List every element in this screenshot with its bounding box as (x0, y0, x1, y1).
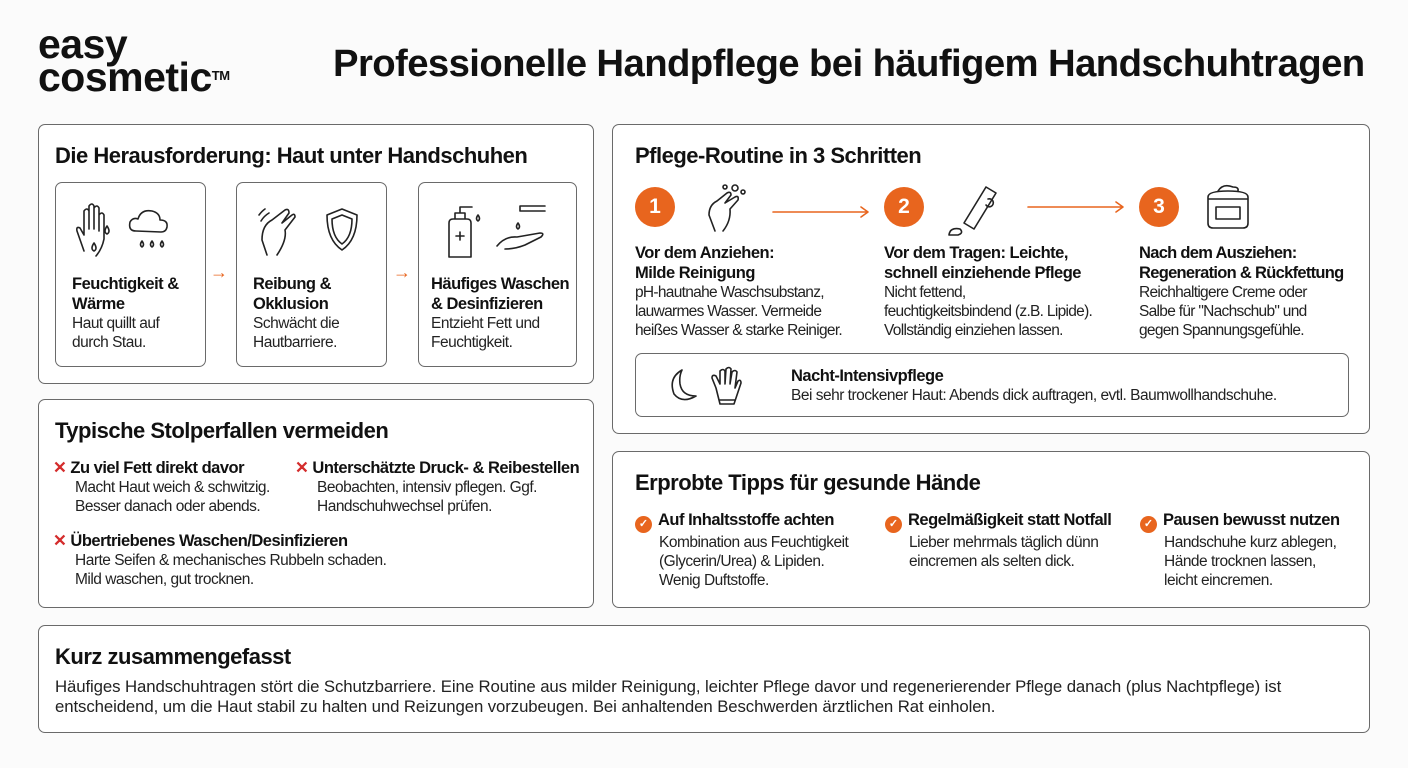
night box: Nacht-Intensivpflege (791, 367, 943, 385)
pitfall 1: Macht Haut weich & schwitzig. (75, 479, 270, 496)
pitfall 3: Harte Seifen & mechanisches Rubbeln schaden. (75, 552, 386, 569)
step 1: pH-hautnahe Waschsubstanz, (635, 284, 824, 301)
tip 2: ✓ (889, 518, 898, 530)
step 2 (884, 186, 1092, 339)
panel: tips (612, 451, 1370, 608)
card: washing: Häufiges Waschen (431, 275, 569, 293)
card: moisture (55, 182, 206, 367)
tip 3 (1140, 511, 1340, 589)
night box (635, 353, 1349, 417)
arrow: → (210, 262, 228, 282)
tip 2 (885, 511, 1111, 570)
step 2: Vollständig einziehen lassen. (884, 322, 1063, 339)
heading: tips: Erprobte Tipps für gesunde Hände (635, 470, 980, 495)
card: friction: Okklusion (253, 295, 328, 313)
panel: summary (38, 625, 1370, 733)
tip 3: Hände trocknen lassen, (1164, 553, 1316, 570)
step 3 (1139, 184, 1344, 339)
pitfall 2: ✕ Unterschätzte Druck- & Reibestellen (295, 459, 579, 477)
card: friction (236, 182, 387, 367)
step 3: Salbe für "Nachschub" und (1139, 303, 1307, 320)
tip 1: Wenig Duftstoffe. (659, 572, 769, 589)
card: moisture: Haut quillt auf (72, 315, 159, 332)
card: washing: Entzieht Fett und (431, 315, 540, 332)
tip 3: leicht eincremen. (1164, 572, 1273, 589)
logo (38, 21, 230, 100)
panel: routine (612, 124, 1370, 434)
tip 1: (Glycerin/Urea) & Lipiden. (659, 553, 824, 570)
panel: pitfalls (38, 399, 594, 608)
step 3: 3 (1153, 195, 1165, 218)
card: moisture: durch Stau. (72, 334, 146, 351)
tip 3: ✓ (1144, 518, 1153, 530)
logo: easy (38, 21, 127, 67)
summary text: Häufiges Handschuhtragen stört die Schutzbarriere. Eine Routine aus milder Reinigung, leichter Pflege davor und regenerierender Pflege danach (plus Nachtpflege) ist (55, 677, 1281, 696)
heading: summary: Kurz zusammengefasst (55, 644, 291, 669)
icon: tube (948, 186, 997, 236)
icon: hand and cloud (76, 203, 168, 257)
card: friction: Reibung & (253, 275, 331, 293)
icon: dispenser and tap (448, 205, 546, 258)
arrow (1027, 201, 1124, 213)
logo: cosmeticTM (38, 54, 230, 100)
pitfall 3: Mild waschen, gut trocknen. (75, 571, 254, 588)
icon: cream jar (1207, 184, 1249, 229)
step 1: Vor dem Anziehen: (635, 244, 774, 262)
panel: challenge (38, 124, 594, 384)
pitfall 2: Beobachten, intensiv pflegen. Ggf. (317, 479, 537, 496)
pitfall 1 (53, 459, 270, 515)
tip 3: Handschuhe kurz ablegen, (1164, 534, 1336, 551)
tip 1: Auf Inhaltsstoffe achten (658, 511, 834, 529)
pitfall 1: Besser danach oder abends. (75, 498, 260, 515)
tip 2: Lieber mehrmals täglich dünn (909, 534, 1098, 551)
arrow (772, 206, 869, 218)
step 1 (635, 184, 842, 339)
tip 2: eincremen als selten dick. (909, 553, 1074, 570)
step 2: Vor dem Tragen: Leichte, (884, 244, 1068, 262)
pitfall 2: Handschuhwechsel prüfen. (317, 498, 492, 515)
tip 3: Pausen bewusst nutzen (1163, 511, 1340, 529)
heading: routine: Pflege-Routine in 3 Schritten (635, 143, 921, 168)
title: Professionelle Handpflege bei häufigem Handschuhtragen (333, 42, 1365, 85)
step 2: feuchtigkeitsbindend (z.B. Lipide). (884, 303, 1092, 320)
heading: challenge: Die Herausforderung: Haut unter Handschuhen (55, 143, 527, 168)
step 2: 2 (898, 195, 910, 218)
summary text (55, 677, 1282, 716)
step 1: Milde Reinigung (635, 264, 755, 282)
tip 1: Kombination aus Feuchtigkeit (659, 534, 848, 551)
arrow: → (393, 262, 411, 282)
heading: pitfalls: Typische Stolperfallen vermeiden (55, 418, 388, 443)
step 1: heißes Wasser & starke Reiniger. (635, 322, 842, 339)
card: friction: Hautbarriere. (253, 334, 337, 351)
tip 2: Regelmäßigkeit statt Notfall (908, 511, 1111, 529)
step 3: gegen Spannungsgefühle. (1139, 322, 1304, 339)
card: moisture: Wärme (72, 295, 125, 313)
tip 1 (635, 511, 849, 589)
tip 1: ✓ (639, 518, 648, 530)
step 1: 1 (649, 195, 661, 218)
card: washing (418, 182, 577, 367)
step 3: Regeneration & Rückfettung (1139, 264, 1344, 282)
step 1: lauwarmes Wasser. Vermeide (635, 303, 821, 320)
step 2: schnell einziehende Pflege (884, 264, 1081, 282)
pitfall 3 (53, 532, 386, 588)
card: washing: & Desinfizieren (431, 295, 543, 313)
card: moisture: Feuchtigkeit & (72, 275, 179, 293)
step 2: Nicht fettend, (884, 284, 966, 301)
card: washing: Feuchtigkeit. (431, 334, 512, 351)
step 3: Reichhaltigere Creme oder (1139, 284, 1307, 301)
icon: hands and shield (258, 208, 358, 256)
night box: Bei sehr trockener Haut: Abends dick auftragen, evtl. Baumwollhandschuhe. (791, 387, 1277, 404)
pitfall 2 (295, 459, 579, 515)
pitfall 1: ✕ Zu viel Fett direkt davor (53, 459, 244, 477)
pitfall 3: ✕ Übertriebenes Waschen/Desinfizieren (53, 532, 348, 550)
icon: washing hands (708, 184, 746, 232)
icon: moon and gloves (671, 366, 742, 405)
summary text: entscheidend, um die Haut stabil zu halten und Reizungen vorzubeugen. Bei anhaltenden Beschwerden ärztlichen Rat einholen. (55, 697, 995, 716)
step 3: Nach dem Ausziehen: (1139, 244, 1297, 262)
card: friction: Schwächt die (253, 315, 339, 332)
